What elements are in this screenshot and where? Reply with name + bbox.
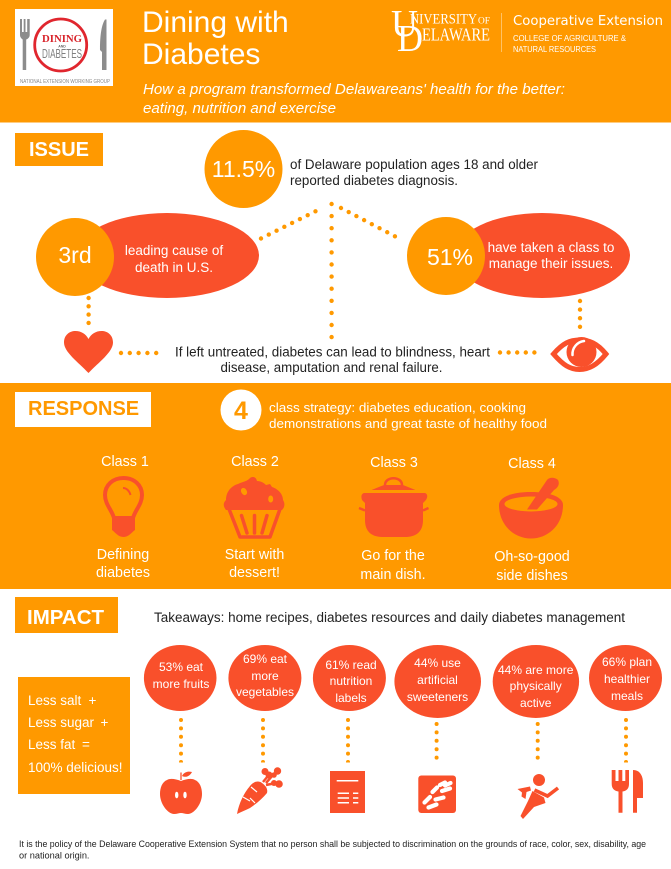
icon: light bulb (105, 478, 142, 537)
college name (513, 14, 663, 54)
stat: 11.5%: reported diabetes diagnosis. (290, 173, 458, 188)
subtitle: How a program transformed Delawareans' health for the better: (143, 82, 565, 98)
callout: 4 class strategy: 4 (234, 397, 248, 425)
divider (501, 13, 502, 52)
class 3: main dish. (360, 567, 426, 583)
icon: wheat (418, 776, 456, 813)
subtitle: eating, nutrition and exercise (143, 101, 336, 117)
logo: University of Delaware: ELAWARE (422, 24, 490, 44)
stat: healthier meals (589, 645, 662, 813)
logo: University of Delaware: U (391, 3, 418, 45)
class 3: Go for the (361, 548, 425, 564)
stat: 3rd: death in U.S. (135, 260, 213, 275)
logo: Dining with Diabetes: NATIONAL EXTENSION WORKING GROUP (20, 79, 111, 85)
stat: sweeteners: 44% use (414, 656, 461, 670)
class 4: Oh-so-good (494, 549, 570, 565)
stat: physically active: physically (510, 679, 562, 693)
icon: cupcake (224, 477, 284, 537)
logo: Dining with Diabetes: AND (58, 44, 66, 48)
stat: vegetables: 69% eat (243, 652, 288, 666)
stat: healthier meals: meals (611, 689, 643, 703)
college name: NATURAL RESOURCES (513, 45, 596, 54)
footer disclaimer (19, 839, 646, 860)
class 1: Defining (97, 547, 149, 563)
icon: carrot (237, 767, 283, 814)
callout: less salt: Less fat (28, 737, 76, 752)
heading: response (15, 392, 151, 427)
callout: less salt: + (88, 693, 96, 708)
logo: Dining with Diabetes: DINING (42, 34, 82, 45)
stat: 3rd: 3rd (58, 242, 92, 268)
class 3 (359, 455, 428, 583)
dotted connectors (89, 204, 580, 353)
stat: healthier meals: 66% plan (602, 655, 652, 669)
callout: less salt: + (100, 715, 108, 730)
icon: eye (554, 337, 606, 370)
heading: response: RESPONSE (28, 398, 139, 420)
stat: sweeteners (394, 645, 481, 813)
footer disclaimer: It is the policy of the Delaware Cooperative Extension System that no person shall be subjected to discrimination on the grounds of race, color, sex, disability, age (19, 839, 646, 849)
logo: University of Delaware: D (397, 18, 423, 60)
stat: sweeteners: sweeteners (407, 690, 468, 704)
subtitle (143, 82, 565, 117)
stat: healthier meals: healthier (604, 672, 650, 686)
heading: impact (15, 597, 118, 633)
stat: 51% (407, 213, 630, 298)
panel: header (0, 0, 671, 122)
icon: heart (64, 331, 113, 373)
panel: impact (15, 597, 662, 819)
stat: 11.5% (204, 130, 538, 208)
stat: vegetables (228, 645, 301, 814)
class 4: Class 4 (508, 456, 556, 472)
stat: labels (313, 645, 386, 813)
stat: sweeteners: artificial (417, 673, 458, 687)
logo: University of Delaware: NIVERSITY (410, 12, 477, 28)
callout: less salt (18, 677, 130, 794)
takeaways text: Takeaways: home recipes, diabetes resources and daily diabetes management (154, 610, 625, 625)
warning text: If left untreated, diabetes can lead to blindness, heart (175, 344, 490, 360)
stat: physically active: active (520, 696, 552, 710)
college name: Cooperative Extension (513, 14, 663, 29)
warning text (175, 344, 490, 375)
panel: issue (15, 130, 630, 375)
logo: University of Delaware (391, 3, 490, 60)
warning text: disease, amputation and renal failure. (220, 360, 442, 375)
class 2: dessert! (229, 565, 280, 581)
title (142, 6, 289, 71)
class 1: Class 1 (101, 454, 149, 470)
heading: impact: IMPACT (27, 606, 105, 629)
class 1: diabetes (96, 565, 150, 581)
stat: 3rd: leading cause of (125, 243, 223, 258)
title: Dining with (142, 6, 289, 39)
callout: less salt: = (82, 737, 90, 752)
callout: 4 class strategy: demonstrations and great taste of healthy food (269, 416, 547, 431)
icon: mortar and pestle (499, 478, 563, 538)
stat: vegetables: vegetables (236, 685, 294, 699)
callout: 4 class strategy (220, 390, 547, 431)
college name: COLLEGE OF AGRICULTURE & (513, 34, 627, 43)
stat: labels: 61% read (325, 658, 377, 672)
stat: 51%: have taken a class to (488, 240, 614, 255)
icon: pot (359, 478, 428, 537)
callout: less salt: Less salt (28, 693, 82, 708)
stat: 51%: manage their issues. (489, 256, 613, 271)
logo: Dining with Diabetes: DIABETES (42, 46, 82, 61)
callout: less salt: 100% delicious! (28, 760, 123, 775)
class 4 (494, 456, 570, 584)
logo: Dining with Diabetes (15, 9, 113, 86)
icon: nutrition label (330, 771, 365, 813)
class 2: Class 2 (231, 454, 279, 470)
class 2: Start with (225, 547, 284, 563)
class 4: side dishes (496, 568, 568, 584)
stat: 51%: 51% (427, 244, 473, 270)
stat: 11.5%: 11.5% (212, 156, 275, 182)
stat: physically active: 44% are more (498, 663, 574, 677)
class 2 (224, 454, 284, 581)
stat: physically active (493, 645, 579, 819)
stat: labels: nutrition (330, 674, 372, 688)
class 1 (96, 454, 150, 581)
callout: less salt: Less sugar (28, 715, 95, 730)
footer disclaimer: or national origin. (19, 850, 89, 860)
stat: labels: labels (335, 691, 367, 705)
stat: fruits: 53% eat (159, 660, 204, 674)
icon: fork and knife (612, 770, 643, 813)
stat: fruits: more fruits (153, 677, 209, 691)
icon: runner (518, 774, 558, 819)
heading: issue (15, 133, 103, 166)
title: Diabetes (142, 38, 260, 71)
stat: 11.5%: of Delaware population ages 18 and older (290, 157, 538, 172)
stat: fruits (144, 645, 216, 814)
callout: 4 class strategy: class strategy: diabetes education, cooking (269, 400, 526, 415)
icon: apple (160, 772, 202, 814)
logo: University of Delaware: OF (478, 16, 490, 26)
stat: 3rd (36, 213, 259, 298)
panel: response (0, 383, 671, 589)
stat: vegetables: more (251, 669, 279, 683)
heading: issue: ISSUE (29, 139, 89, 161)
class 3: Class 3 (370, 455, 418, 471)
